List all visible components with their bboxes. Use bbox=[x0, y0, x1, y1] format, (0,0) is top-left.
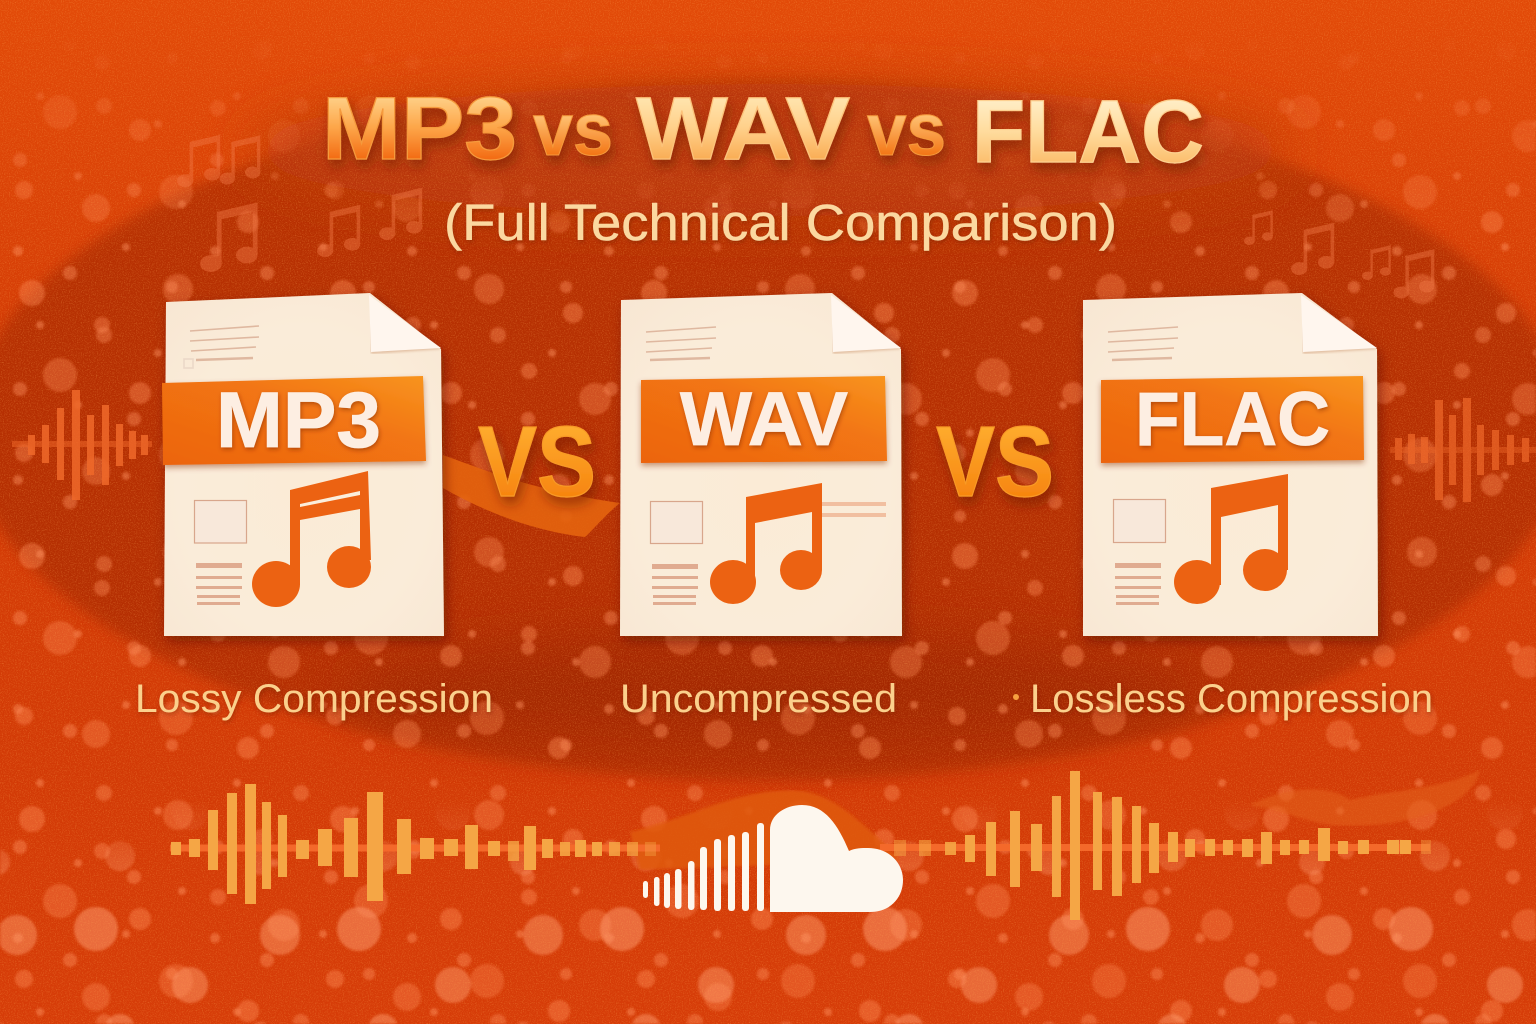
header lines bbox=[646, 327, 716, 360]
VS badge 2: VS bbox=[936, 406, 1054, 518]
file card: WAV bbox=[620, 293, 902, 636]
title: MP3 bbox=[322, 78, 517, 178]
paper sheet bbox=[1083, 293, 1378, 636]
title: vs bbox=[533, 88, 613, 171]
paper sheet bbox=[620, 293, 902, 636]
right side lines bbox=[822, 502, 886, 517]
title: FLAC bbox=[972, 81, 1204, 181]
banner bbox=[1101, 376, 1364, 463]
page fold bbox=[369, 295, 441, 354]
placeholder box bbox=[194, 500, 246, 543]
title: WAV bbox=[636, 78, 850, 178]
music note bbox=[1174, 474, 1288, 604]
right side waveform bbox=[1390, 398, 1536, 502]
banner bbox=[162, 376, 426, 465]
page fold bbox=[1301, 295, 1377, 354]
header lines bbox=[1108, 327, 1178, 360]
caption: lossless: Lossless Compression bbox=[1030, 677, 1433, 721]
caption: lossy: Lossy Compression bbox=[135, 677, 493, 721]
caption dot bbox=[1013, 694, 1019, 700]
page fold bbox=[831, 295, 901, 354]
left side waveform bbox=[12, 390, 152, 500]
caption: uncompressed: Uncompressed bbox=[620, 677, 897, 721]
body lines bbox=[652, 564, 698, 605]
banner label: MP3 bbox=[216, 375, 381, 464]
title: vs bbox=[867, 88, 946, 171]
decorative swooshes bbox=[443, 455, 1480, 870]
paper sheet bbox=[164, 293, 444, 636]
banner label: FLAC bbox=[1135, 377, 1330, 462]
music note bbox=[710, 483, 822, 604]
file card: MP3 bbox=[162, 293, 444, 636]
music note bbox=[252, 471, 371, 607]
header lines bbox=[184, 326, 259, 368]
title bbox=[322, 78, 1204, 181]
faint music notes, left bbox=[177, 135, 422, 272]
placeholder box bbox=[650, 502, 702, 544]
placeholder box bbox=[1114, 500, 1166, 542]
icon: cloud logo bbox=[643, 805, 903, 912]
banner bbox=[641, 376, 887, 463]
subtitle: (Full Technical Comparison) bbox=[444, 194, 1117, 251]
VS badge 1: VS bbox=[478, 406, 596, 518]
body lines bbox=[196, 563, 242, 605]
body lines bbox=[1115, 563, 1161, 605]
bottom waveform: right bbox=[880, 771, 1431, 920]
bottom waveform: left bbox=[170, 784, 660, 904]
banner label: WAV bbox=[680, 377, 848, 462]
file card: FLAC bbox=[1083, 293, 1378, 636]
faint music notes, right bbox=[1244, 210, 1434, 298]
